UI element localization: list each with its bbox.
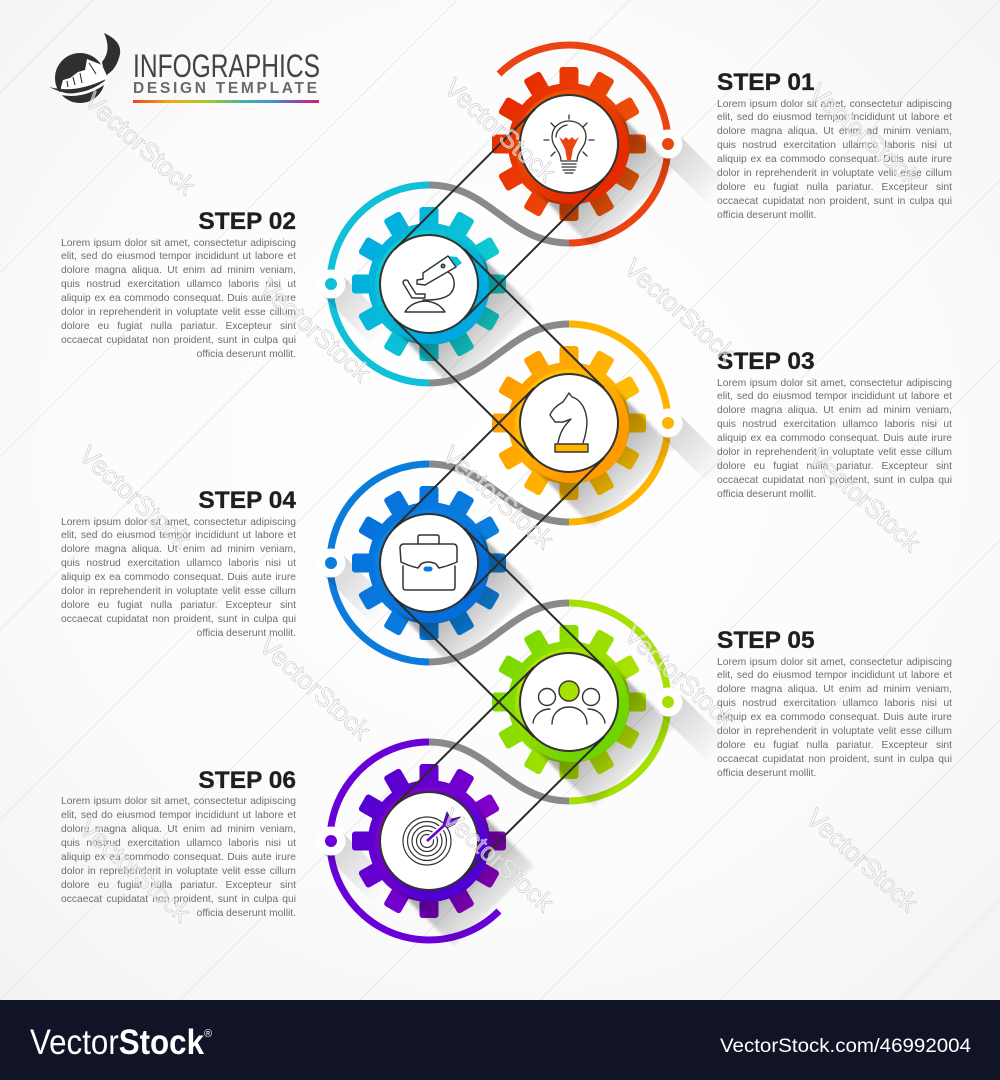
rainbow bar [133, 100, 319, 103]
step 5 text [717, 656, 952, 779]
step 1 text: dolor in reprehenderit in voluptate velit esse cillum [717, 168, 952, 179]
step 5 text: officia deserunt mollit. [717, 768, 816, 779]
step 2 text: dolore eu fugiat nulla pariatur. Excepteur sint [61, 321, 296, 332]
step 4 connector dot [316, 548, 393, 625]
step 4 heading: STEP 04 [198, 487, 296, 514]
VectorStock watermarks: VectorStock [438, 72, 562, 188]
step 3 text: occaecat cupidatat non proident, sunt in culpa qui [717, 475, 952, 486]
icon: briefcase [400, 535, 457, 590]
step 4 gear node [316, 464, 534, 668]
step 3 text: quis nostrud exercitation ullamco laboris nisi ut [717, 419, 952, 430]
step 6 text: elit, sed do eiusmod tempor incididunt ut labore et [61, 810, 296, 821]
icon: microscope [403, 256, 462, 312]
step 2 text: occaecat cupidatat non proident, sunt in culpa qui [61, 335, 296, 346]
step 6 ring arc [330, 742, 499, 940]
step 3 text: dolore eu fugiat nulla pariatur. Excepteur sint [717, 461, 952, 472]
VectorStock watermarks: VectorStock [253, 630, 377, 746]
step 1 heading: STEP 01 [717, 69, 815, 96]
step 6 connector dot [316, 826, 393, 903]
icon: target with arrow [403, 812, 460, 865]
step 2 text: aliquip ex ea commodo consequat. Duis aute irure [61, 293, 296, 304]
step 6 text: quis nostrud exercitation ullamco laboris nisi ut [61, 838, 296, 849]
VectorStock watermarks: VectorStock [253, 272, 377, 388]
tangent belt lines [394, 109, 604, 876]
step 3 text: dolor in reprehenderit in voluptate velit esse cillum [717, 447, 952, 458]
step 3 text: elit, sed do eiusmod tempor incididunt ut labore et [717, 391, 952, 402]
step 4 text: dolor in reprehenderit in voluptate velit esse cillum [61, 586, 296, 597]
VectorStock watermarks: VectorStock [800, 802, 924, 918]
VectorStock watermarks: VectorStock [436, 439, 560, 555]
icon: people [533, 681, 605, 724]
logo subtitle: DESIGN TEMPLATE [133, 80, 317, 97]
footer bar [0, 1000, 1000, 1080]
VectorStock watermarks [73, 72, 927, 928]
footer registered mark: ® [204, 1028, 212, 1040]
step 5 gear [495, 628, 674, 807]
step 6 text: occaecat cupidatat non proident, sunt in culpa qui [61, 894, 296, 905]
step 2 gear node [316, 185, 534, 389]
step 1 text: Lorem ipsum dolor sit amet, consectetur adipiscing [717, 98, 952, 110]
grey connector 4-5 [429, 603, 569, 662]
step 1 text: elit, sed do eiusmod tempor incididunt ut labore et [717, 112, 952, 123]
VectorStock watermarks: VectorStock [618, 619, 742, 735]
step 1 text [717, 98, 952, 221]
VectorStock watermarks: VectorStock [436, 802, 560, 918]
step 5 text: aliquip ex ea commodo consequat. Duis aute irure [717, 712, 952, 723]
step 1 gear [495, 70, 674, 249]
step 2 text: quis nostrud exercitation ullamco laboris nisi ut [61, 279, 296, 290]
VectorStock watermarks: VectorStock [73, 439, 197, 555]
step 6 text: dolore eu fugiat nulla pariatur. Excepteur sint [61, 880, 296, 891]
VectorStock watermarks: VectorStock [73, 812, 197, 928]
step 2 gear [355, 210, 534, 389]
step 6 text: dolor in reprehenderit in voluptate velit esse cillum [61, 866, 296, 877]
step 4 text: dolore magna aliqua. Ut enim ad minim veniam, [61, 544, 296, 555]
VectorStock watermarks: VectorStock [618, 252, 742, 368]
step 1 text: occaecat cupidatat non proident, sunt in culpa qui [717, 196, 952, 207]
VectorStock watermarks: VectorStock [803, 442, 927, 558]
step 5 heading: STEP 05 [717, 627, 815, 654]
step 6 text: officia deserunt mollit. [197, 908, 296, 919]
step 2 text: dolore magna aliqua. Ut enim ad minim veniam, [61, 265, 296, 276]
step 5 text: dolore magna aliqua. Ut enim ad minim veniam, [717, 684, 952, 695]
step 6 text: Lorem ipsum dolor sit amet, consectetur adipiscing [61, 796, 296, 807]
step 4 text: Lorem ipsum dolor sit amet, consectetur adipiscing [61, 516, 296, 528]
step 5 connector dot [654, 688, 730, 764]
step 2 text: dolor in reprehenderit in voluptate velit esse cillum [61, 307, 296, 318]
step 4 text: officia deserunt mollit. [197, 628, 296, 639]
step 5 text: dolor in reprehenderit in voluptate velit esse cillum [717, 726, 952, 737]
step 4 gear [355, 489, 534, 668]
grey connector 1-2 [429, 185, 569, 243]
footer url: VectorStock.com/46992004 [720, 1036, 971, 1057]
step 4 text: quis nostrud exercitation ullamco laboris nisi ut [61, 558, 296, 569]
step 3 text: dolore magna aliqua. Ut enim ad minim veniam, [717, 405, 952, 416]
step 6 text [61, 796, 296, 919]
grey connector 2-3 [429, 324, 569, 383]
step 4 text [61, 516, 296, 639]
step 3 text: aliquip ex ea commodo consequat. Duis aute irure [717, 433, 952, 444]
step 5 text: Lorem ipsum dolor sit amet, consectetur adipiscing [717, 656, 952, 668]
step 2 heading: STEP 02 [198, 208, 296, 235]
step 3 heading: STEP 03 [717, 348, 815, 375]
step 3 connector dot [654, 408, 730, 485]
step 1 text: dolore eu fugiat nulla pariatur. Excepteur sint [717, 182, 952, 193]
step 5 text: quis nostrud exercitation ullamco laboris nisi ut [717, 698, 952, 709]
step 1 connector dot [654, 130, 730, 206]
step 5 ring arc [569, 603, 668, 801]
footer brand: VectorStock [30, 1023, 204, 1062]
step 6 heading: STEP 06 [198, 767, 296, 794]
step 3 gear [495, 349, 674, 528]
step 1 text: dolore magna aliqua. Ut enim ad minim veniam, [717, 126, 952, 137]
step 5 text: dolore eu fugiat nulla pariatur. Excepteur sint [717, 740, 952, 751]
step 1 gear node [495, 45, 730, 249]
step 4 text: occaecat cupidatat non proident, sunt in culpa qui [61, 614, 296, 625]
VectorStock watermarks: VectorStock [78, 85, 202, 201]
step 6 gear node [316, 742, 534, 946]
step 2 text: Lorem ipsum dolor sit amet, consectetur adipiscing [61, 238, 296, 248]
step 3 text [717, 378, 952, 500]
step 3 gear node [495, 324, 730, 528]
step 2 text: officia deserunt mollit. [197, 349, 296, 360]
step 3 ring arc [569, 324, 668, 522]
step 3 text: Lorem ipsum dolor sit amet, consectetur adipiscing [717, 378, 952, 388]
step 4 text: aliquip ex ea commodo consequat. Duis aute irure [61, 572, 296, 583]
step 5 text: elit, sed do eiusmod tempor incididunt ut labore et [717, 670, 952, 681]
step 2 connector dot [316, 270, 393, 346]
step 2 text: elit, sed do eiusmod tempor incididunt ut labore et [61, 251, 296, 262]
step 1 ring arc [499, 45, 668, 243]
step 6 text: aliquip ex ea commodo consequat. Duis aute irure [61, 852, 296, 863]
step 2 ring arc [330, 185, 429, 383]
step 6 text: dolore magna aliqua. Ut enim ad minim veniam, [61, 824, 296, 835]
step 4 text: elit, sed do eiusmod tempor incididunt ut labore et [61, 530, 296, 541]
step 4 ring arc [330, 464, 429, 662]
grey connector 5-6 [429, 742, 569, 801]
step 5 text: occaecat cupidatat non proident, sunt in culpa qui [717, 754, 952, 765]
grey connector 3-4 [429, 464, 569, 522]
step 1 text: aliquip ex ea commodo consequat. Duis aute irure [717, 154, 952, 165]
step 5 gear node [495, 603, 730, 807]
step 2 text [61, 238, 296, 360]
icon: light bulb [544, 115, 594, 173]
logo mark [49, 33, 120, 103]
step 1 text: quis nostrud exercitation ullamco laboris nisi ut [717, 140, 952, 151]
step 6 gear [355, 767, 534, 946]
logo title: INFOGRAPHICS [133, 48, 320, 84]
VectorStock watermarks: VectorStock [803, 77, 927, 193]
step 4 text: dolore eu fugiat nulla pariatur. Excepteur sint [61, 600, 296, 611]
logo [49, 33, 320, 103]
step 1 text: officia deserunt mollit. [717, 210, 816, 221]
step 3 text: officia deserunt mollit. [717, 489, 816, 500]
icon: chess knight [550, 393, 588, 452]
